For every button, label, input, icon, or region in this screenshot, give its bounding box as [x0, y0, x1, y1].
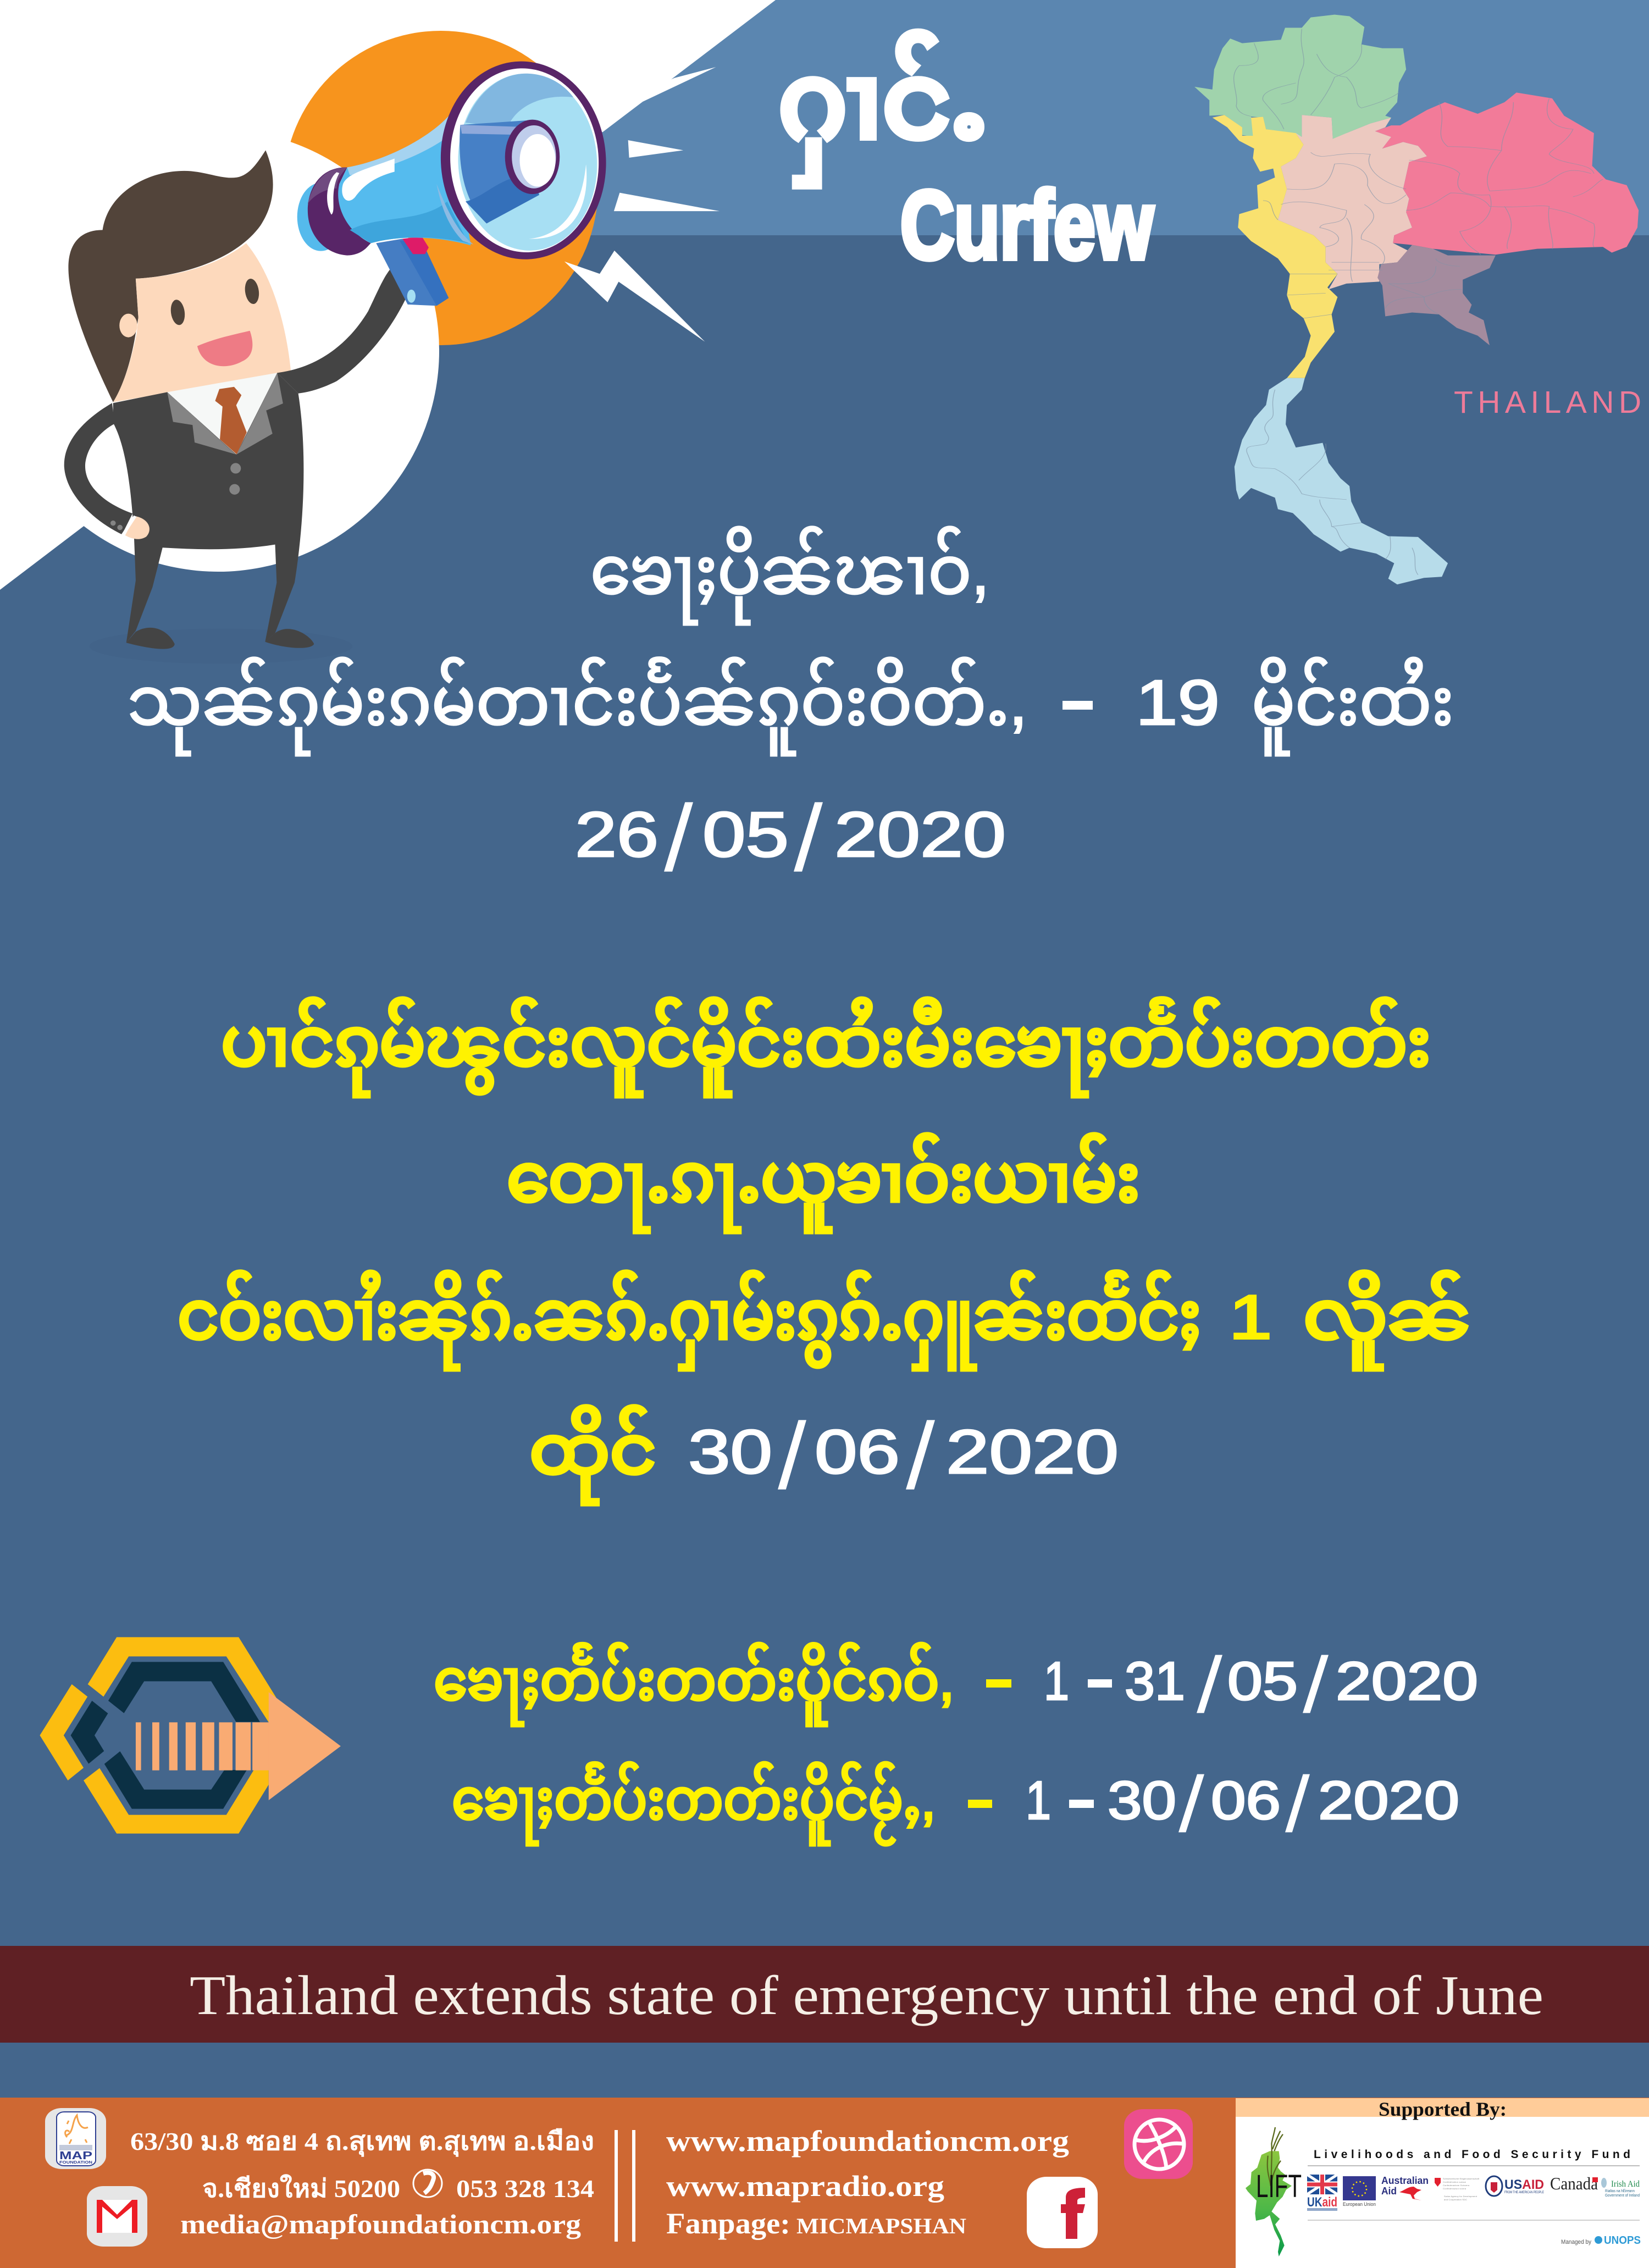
- region: north (green): [1194, 15, 1406, 140]
- supported by heading: Supported By:: [1379, 2098, 1507, 2120]
- icon: dribbble: [1124, 2109, 1193, 2179]
- logo: UK aid: UKaid: [1307, 2195, 1337, 2210]
- logo: Swiss agency: [1435, 2177, 1480, 2201]
- white diagonal background: [0, 0, 776, 590]
- email address: media@mapfoundationcm.org: [180, 2209, 581, 2239]
- logo: Australian Aid: Australian: [1381, 2175, 1429, 2186]
- icon: facebook: [1027, 2177, 1098, 2248]
- website 2: www.mapradio.org: [666, 2170, 944, 2203]
- fanpage: MICMAPSHAN: [796, 2214, 966, 2238]
- sound rays and lightning bolt: [565, 67, 720, 342]
- headline line 3: လိူၼ်: [1303, 1270, 1471, 1370]
- logo: USAID: USAID: [1504, 2177, 1544, 2192]
- date: 26/05/2020: [575, 785, 1006, 891]
- heading: news line 1: ၶေႃႈပိုၼ်ၽၢဝ်,: [590, 525, 989, 625]
- icon: gmail: [87, 2186, 147, 2247]
- schedule line: new order: 30: [1108, 1770, 1176, 1830]
- icon: MAP Foundation logo: [45, 2108, 106, 2169]
- date: 26/05/2020: 2020: [834, 799, 1006, 870]
- region: central (beige): [1278, 115, 1427, 289]
- logo: USAID: FROM THE AMERICAN PEOPLE: [1504, 2191, 1544, 2194]
- logo: LIFT map: LIFT: [1256, 2169, 1302, 2204]
- fanpage: [666, 2207, 966, 2240]
- illustration: megaphone: [297, 59, 610, 306]
- logo: Irish Aid: Government of Ireland: [1605, 2194, 1640, 2198]
- date: 30/06/2020: /: [778, 1403, 806, 1509]
- phone number: 053 328 134: [456, 2175, 594, 2203]
- icon: MAP Foundation logo: FOUNDATION: [59, 2161, 92, 2165]
- date: 26/05/2020: /: [664, 785, 693, 891]
- logo: Swiss agency: Confederazione Svizzera: [1443, 2184, 1470, 2187]
- headline line 3: 1: [1229, 1282, 1272, 1352]
- region: south (light blue): [1235, 378, 1448, 584]
- date: 30/06/2020: 2020: [946, 1417, 1119, 1486]
- headline: yellow announcement: [178, 997, 1471, 1504]
- fund name: Livelihoods and Food Security Fund: [1314, 2148, 1630, 2161]
- date: 26/05/2020: 05: [702, 799, 789, 870]
- banner: maroon band: Thailand extends state of emergency until the end of June: [190, 1965, 1543, 2027]
- footer: contact panel: [0, 2098, 1649, 2268]
- illustration: businessman: [64, 150, 406, 663]
- region: east (mauve): [1377, 245, 1496, 345]
- panel: supporters: [1236, 2098, 1649, 2268]
- logo: USAID: [1486, 2176, 1544, 2196]
- logo: Swiss agency: and Cooperation SDC: [1444, 2198, 1467, 2201]
- icon: phone: [413, 2170, 442, 2197]
- schedule line: new order: [452, 1760, 1459, 1849]
- headline line 3: ငဝ်းလၢႆးၼိုၵ်ႉၼၵ်ႉႁၢမ်းၵွၵ်ႉႁူၼ်းထႅင်ႈ: [178, 1270, 1201, 1370]
- logo: European Union: European Union: [1343, 2201, 1376, 2207]
- schedule line: new order: ၶေႃႈတႅပ်းတတ်းပိူင်မႂ်ႇ,: [452, 1762, 936, 1845]
- schedule line: old order: 1: [1044, 1651, 1069, 1711]
- headline line 3: [178, 1270, 1471, 1370]
- heading: news line 2: မိူင်းထႆး: [1252, 656, 1454, 756]
- map label: THAILAND: THAILAND: [1454, 385, 1641, 420]
- schedule line: old order: 2020: [1336, 1651, 1478, 1711]
- date: 30/06/2020: 30: [688, 1417, 772, 1486]
- logo: Australian Aid: [1381, 2175, 1429, 2200]
- icon: hexagon arrow: [40, 1637, 341, 1834]
- headline line 2: တေႃႉၵႃႉယူၶၢဝ်းယၢမ်း: [507, 1133, 1140, 1232]
- schedule line: old order: /: [1303, 1641, 1329, 1729]
- logo: Swiss agency: Swiss Agency for Development: [1444, 2195, 1478, 2198]
- schedule line: old order: ၶေႃႈတႅပ်းတတ်းပိူင်ၵဝ်,: [434, 1643, 954, 1726]
- schedule line: old order: /: [1197, 1641, 1223, 1729]
- map: Thailand regions: [1194, 15, 1639, 584]
- heading: news line 2: 19: [1136, 667, 1220, 738]
- address line 2: จ.เชียงใหม่ 50200: [202, 2173, 400, 2203]
- website 1: www.mapfoundationcm.org: [666, 2125, 1069, 2158]
- logo: Irish Aid: Rialtas na hÉireann: [1605, 2188, 1635, 2193]
- schedule line: new order: /: [1178, 1760, 1205, 1849]
- logo: Australian Aid: Aid: [1381, 2186, 1397, 2197]
- heading: news line 2: သုၼ်ၵုမ်းၵမ်တၢင်းပႅၼ်ၵူဝ်းဝိတ်ႉ,: [128, 656, 1027, 756]
- schedule line: new order: 1: [1026, 1770, 1051, 1830]
- schedule line: new order: /: [1285, 1760, 1310, 1849]
- date: 30/06/2020: /: [906, 1403, 935, 1509]
- title: Shan word for curfew: ႁၢင်ႉ: [778, 32, 987, 186]
- logo: managed by UNOPS: Managed by: [1561, 2239, 1591, 2245]
- white circle behind man: [0, 130, 439, 572]
- headline line 1: ပၢင်ၵုမ်ၽွင်းလူင်မိူင်းထႆးမီးၶေႃႈတႅပ်းတတ်း: [221, 997, 1431, 1097]
- logo: UK aid: [1307, 2175, 1337, 2211]
- logo: Swiss agency: Schweizerische Eidgenossenschaft: [1443, 2177, 1480, 2180]
- logo: Swiss agency: Confédération suisse: [1443, 2181, 1467, 2183]
- logo: Swiss agency: Confederaziun svizra: [1443, 2187, 1467, 2190]
- logo: Canada: Canada: [1550, 2173, 1598, 2193]
- divider bars: [616, 2130, 634, 2242]
- date: 30/06/2020: 06: [815, 1417, 900, 1486]
- schedule line: new order: 06: [1211, 1770, 1281, 1830]
- headline line 4: ထိုင်: [529, 1405, 656, 1504]
- logo: Irish Aid: [1601, 2178, 1640, 2198]
- logo: managed by UNOPS: UNOPS: [1604, 2234, 1641, 2247]
- date: 26/05/2020: /: [794, 785, 823, 891]
- heading: news line 2: [128, 656, 1454, 756]
- address line 1: 63/30 ม.8 ซอย 4 ถ.สุเทพ ต.สุเทพ อ.เมือง: [130, 2127, 594, 2157]
- logo: European Union: [1343, 2176, 1376, 2207]
- logo: LIFT map: [1246, 2127, 1302, 2256]
- schedule line: old order: 05: [1227, 1651, 1298, 1711]
- banner: maroon band: [0, 1946, 1649, 2043]
- schedule line: old order: [434, 1641, 1478, 1729]
- fanpage: Fanpage:: [666, 2207, 790, 2240]
- orange circle: [284, 31, 598, 345]
- logo: Irish Aid: Irish Aid: [1611, 2180, 1640, 2189]
- region: west (yellow): [1213, 115, 1337, 378]
- icon: MAP Foundation logo: MAP: [59, 2150, 92, 2162]
- title: Curfew: Curfew: [900, 172, 1154, 279]
- logo: managed by UNOPS: [1561, 2234, 1641, 2247]
- region: northeast (pink): [1375, 92, 1639, 255]
- date: 26/05/2020: 26: [575, 799, 659, 870]
- schedule line: old order: 31: [1125, 1651, 1185, 1711]
- schedule line: new order: 2020: [1318, 1770, 1459, 1830]
- date: 30/06/2020: [688, 1403, 1119, 1509]
